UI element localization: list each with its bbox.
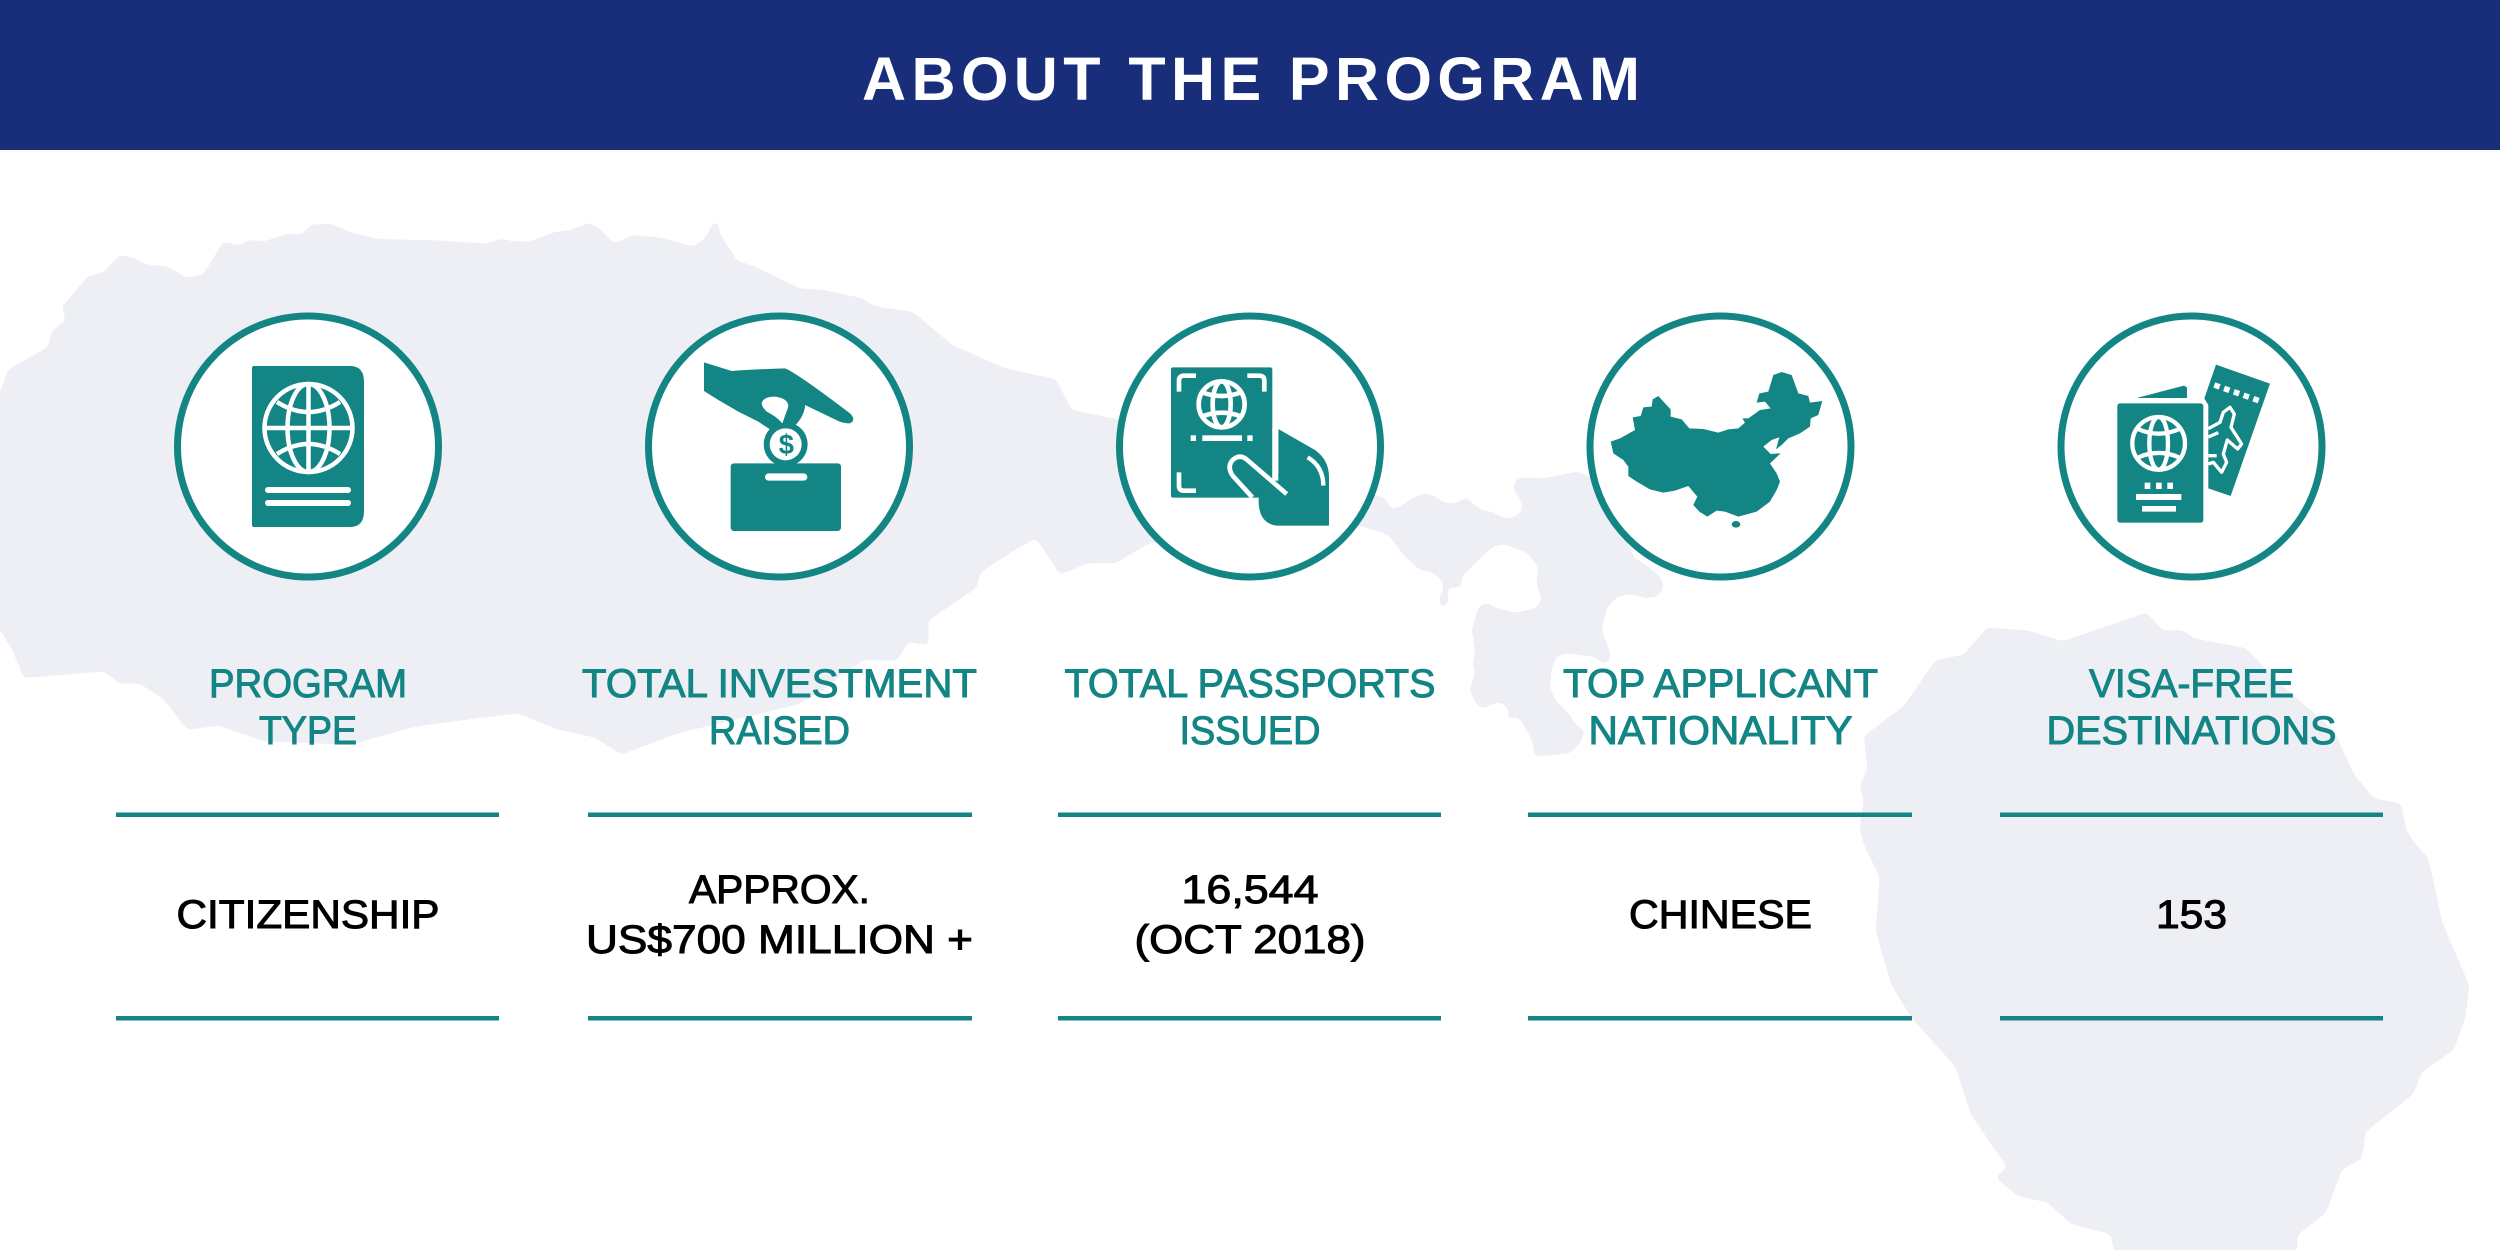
header band — [0, 0, 2500, 150]
label: program type: PROGRAM — [209, 662, 407, 706]
icon: passport and boarding pass — [2117, 365, 2270, 523]
label: total investment raised: TOTAL INVESTMENT — [582, 662, 977, 706]
label: program type: TYPE — [259, 709, 357, 753]
map: main island west — [0, 219, 1196, 754]
column: top applicant nationality — [1528, 316, 1912, 1020]
column: total investment raised — [582, 316, 977, 1020]
value: investment amount: APPROX. — [689, 868, 870, 912]
label: total passports issued — [1064, 662, 1436, 753]
value: investment amount — [586, 868, 973, 962]
value: investment amount: US$700 MILLION + — [586, 918, 973, 962]
label: top applicant nationality: NATIONALITY — [1588, 709, 1852, 753]
value: 153: 153 — [2156, 893, 2227, 937]
column: program type — [116, 316, 499, 1020]
icon: map of China — [1611, 372, 1822, 528]
map: peninsula — [1327, 472, 1664, 757]
value: passports count: (OCT 2018) — [1134, 918, 1366, 962]
icon: hand dropping coin into box — [704, 362, 853, 531]
label: total passports issued: TOTAL PASSPORTS — [1064, 662, 1436, 706]
column: total passports issued — [1058, 316, 1441, 1020]
value: passports count: 16,544 — [1182, 868, 1318, 912]
icon: hand dropping coin into box: $ — [779, 429, 794, 460]
label: program type — [209, 662, 407, 753]
value: citizenship: CITIZENSHIP — [176, 893, 440, 937]
label: top applicant nationality — [1563, 662, 1878, 753]
label: visa-free destinations: DESTINATIONS — [2046, 709, 2336, 753]
label: total investment raised — [582, 662, 977, 753]
label: visa-free destinations: VISA-FREE — [2089, 662, 2294, 706]
map: second island — [1860, 612, 2469, 1250]
value: passports count — [1134, 868, 1366, 962]
title: ABOUT THE PROGRAM — [862, 45, 1640, 113]
value: chinese: CHINESE — [1629, 893, 1812, 937]
icon: hand holding passport — [1171, 367, 1329, 526]
column: visa-free destinations — [2000, 316, 2383, 1020]
icon: passport with globe — [178, 316, 438, 577]
label: total passports issued: ISSUED — [1180, 709, 1320, 753]
label: top applicant nationality: TOP APPLICANT — [1563, 662, 1878, 706]
label: total investment raised: RAISED — [709, 709, 850, 753]
label: visa-free destinations — [2046, 662, 2336, 753]
